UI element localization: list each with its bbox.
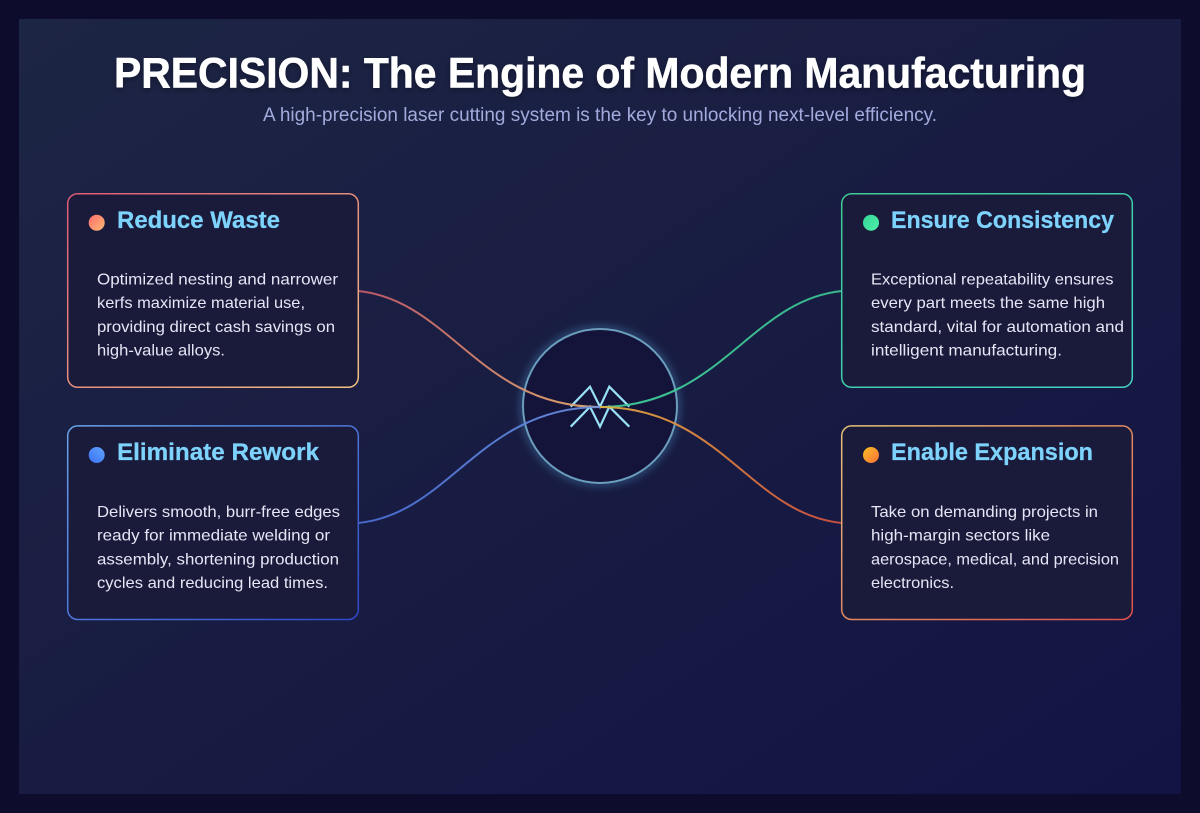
body text: high-margin sectors like	[871, 528, 1050, 544]
icon: green dot	[863, 215, 879, 231]
icon: laser zigzag	[571, 387, 629, 427]
heading: Reduce Waste	[117, 207, 280, 234]
panel: eliminate rework	[68, 426, 358, 620]
heading: Enable Expansion	[891, 439, 1093, 466]
body text: cycles and reducing lead times.	[97, 575, 328, 592]
panel: enable expansion	[842, 426, 1132, 620]
body text: providing direct cash savings on	[97, 319, 335, 336]
body text	[97, 272, 339, 360]
body text: Delivers smooth, burr-free edges	[97, 504, 340, 521]
body text: every part meets the same high	[871, 295, 1105, 312]
body text	[871, 504, 1119, 592]
subtitle: A high-precision laser cutting system is the key to unlocking next-level efficiency.	[263, 105, 937, 126]
icon: blue dot	[89, 447, 105, 463]
heading: Ensure Consistency	[891, 207, 1115, 234]
panel: reduce waste	[68, 194, 358, 387]
panel: ensure consistency	[842, 194, 1132, 387]
connector: ensure consistency to hub	[600, 291, 842, 407]
body text: Take on demanding projects in	[871, 504, 1098, 521]
icon: red dot	[89, 215, 105, 231]
body text: Optimized nesting and narrower	[97, 272, 339, 288]
body text: high-value alloys.	[97, 342, 225, 360]
body text: standard, vital for automation and	[871, 319, 1124, 336]
body text: aerospace, medical, and precision	[871, 552, 1119, 568]
heading: Eliminate Rework	[117, 439, 320, 466]
central laser hub	[522, 328, 678, 484]
body text	[97, 504, 340, 592]
title: PRECISION: The Engine of Modern Manufacturing	[114, 50, 1086, 98]
body text: electronics.	[871, 575, 954, 592]
icon: orange dot	[863, 447, 879, 463]
body text: assembly, shortening production	[97, 552, 339, 568]
connector: reduce waste to hub	[358, 291, 600, 407]
body text	[871, 272, 1124, 360]
connector: enable expansion to hub	[600, 407, 842, 523]
body text: ready for immediate welding or	[97, 528, 331, 544]
body text: intelligent manufacturing.	[871, 342, 1062, 360]
body text: kerfs maximize material use,	[97, 295, 305, 312]
connector: eliminate rework to hub	[358, 407, 600, 523]
body text: Exceptional repeatability ensures	[871, 272, 1114, 288]
